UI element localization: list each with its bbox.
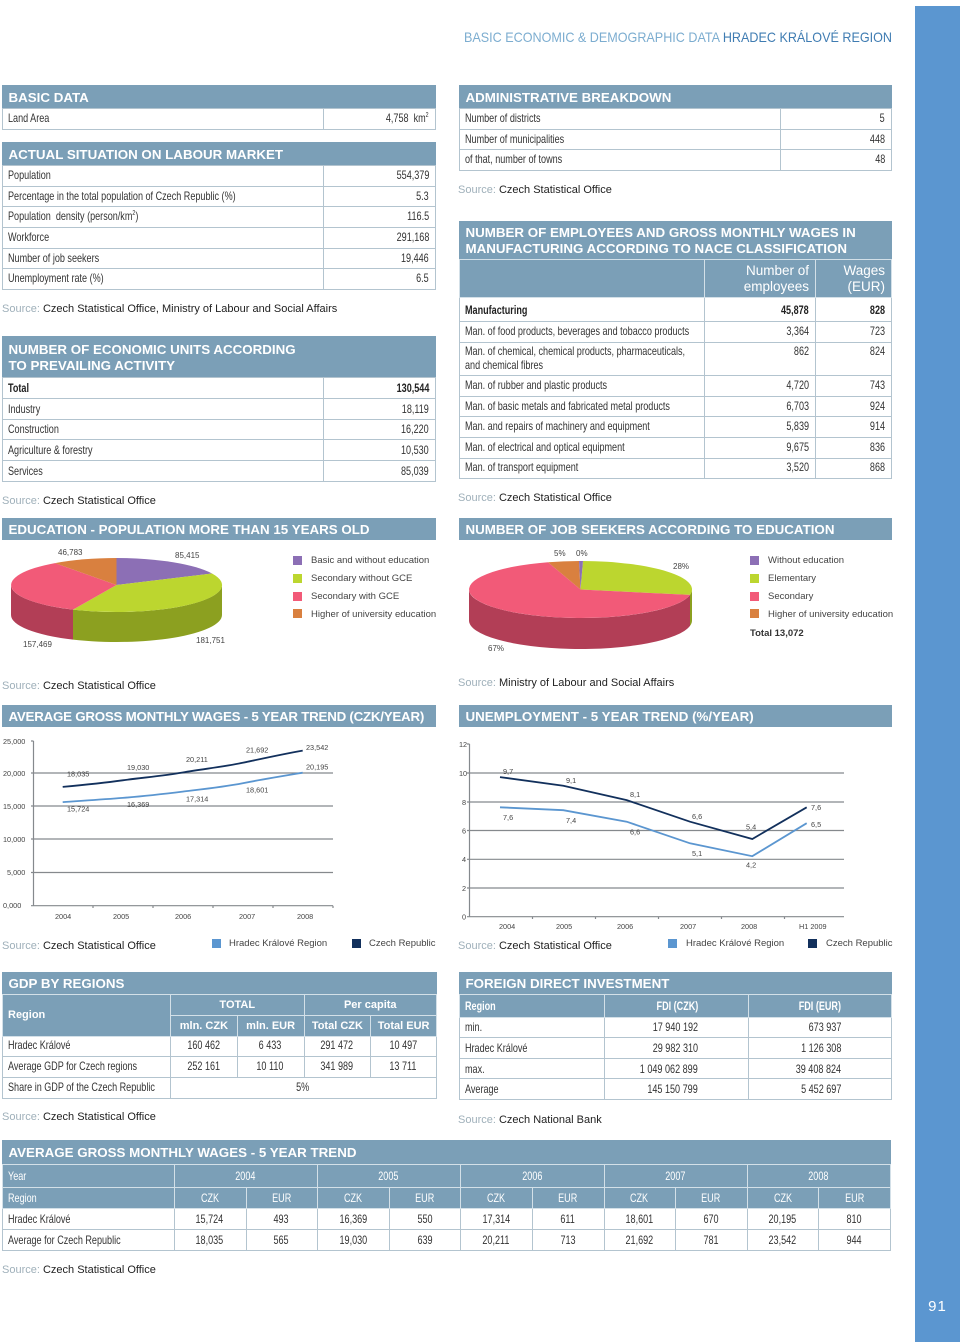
table: GDP by regions: 5% [296,1080,310,1094]
table: labour market: 5.3 [416,189,429,203]
line chart: unemployment trend: 6,6 [630,828,640,836]
table: foreign direct investment: Region [465,999,496,1013]
table: wages five-year table: Average for Czech Republic [8,1233,121,1247]
table: employees and wages: Man. of chemical, chemical products, pharmaceuticals, [465,344,685,358]
legend: education: Higher of university education [311,609,436,620]
line chart: unemployment trend: 8 [462,798,466,807]
line chart: wages trend: 17,314 [186,794,208,804]
source: job seekers: Source: Ministry of Labour and Social Affairs [458,677,674,689]
table: employees and wages: 824 [870,344,885,358]
heading: administrative breakdown [459,85,892,108]
legend: job seekers [750,555,893,639]
table: economic units: Industry [8,402,40,416]
legend: education: Basic and without education [311,555,429,566]
table: wages five-year table [2,1164,891,1251]
table: administrative breakdown: 48 [875,152,885,166]
table: employees and wages: 914 [870,419,885,433]
line chart: wages trend: 23,542 [306,743,328,752]
table: wages five-year table: CZK [773,1191,792,1205]
line chart: unemployment trend [459,740,844,931]
table: economic units: Total [8,381,29,395]
table: employees and wages: 836 [870,440,885,454]
line chart: unemployment trend: 2008 [741,922,757,931]
heading: economic units [2,336,436,377]
line chart: unemployment trend: 2007 [680,922,696,931]
table: wages five-year table: 565 [274,1233,289,1247]
table: wages five-year table: EUR [701,1191,721,1205]
heading: wages five-year table: AVERAGE GROSS MONTHLY WAGES - 5 YEAR TREND [8,1145,356,1160]
legend: unemployment chart: Hradec Králové Region [686,938,784,949]
table: GDP by regions: 6 433 [259,1038,281,1052]
page number: 91 [928,1298,947,1315]
legend: job seekers: Without education [768,555,844,566]
table: labour market [2,165,436,290]
heading: employees and wages [459,221,892,259]
table: GDP by regions: Hradec Králové [8,1038,70,1052]
table: labour market: 6.5 [416,271,429,285]
table: foreign direct investment: 1 049 062 899 [640,1062,698,1076]
table: wages five-year table: CZK [344,1191,362,1205]
table: economic units: Agriculture & forestry [8,443,93,457]
table: GDP by regions: 13 711 [390,1059,417,1073]
table: foreign direct investment: 145 150 799 [648,1082,698,1096]
line chart: unemployment trend: 2004 [499,922,515,931]
table: employees and wages: 924 [870,399,885,413]
pie chart: job seekers: 5% [554,549,566,558]
table: wages five-year table: 23,542 [769,1233,796,1247]
line chart: wages trend: 20,000 [3,769,25,778]
table: employees and wages: 743 [870,378,885,392]
line chart: unemployment trend: 5,1 [692,849,702,858]
pie chart: education: 181,751 [196,636,225,645]
heading: education [2,518,436,540]
table: foreign direct investment: FDI (EUR) [799,999,841,1013]
line chart: wages trend: 19,030 [127,763,149,772]
source: labour market: Source: Czech Statistical Office, Ministry of Labour and Social Affairs [2,303,337,315]
line chart: wages trend: 15,000 [3,802,25,811]
table: economic units: Services [8,464,43,478]
table: foreign direct investment: 29 982 310 [653,1041,698,1055]
table: economic units [2,377,436,482]
panel: basic data [2,85,436,130]
line chart: unemployment trend: 9,1 [566,776,576,785]
line chart: wages trend [3,737,334,921]
table: foreign direct investment: 5 452 697 [801,1082,841,1096]
heading: basic data: BASIC DATA [8,90,89,105]
line chart: wages trend: 10,000 [3,835,25,844]
table: GDP by regions: Average GDP for Czech regions [8,1059,137,1073]
table: wages five-year table: 670 [703,1212,719,1226]
line chart: wages trend: 20,211 [186,755,208,764]
pie chart: job seekers: 0% [576,549,588,558]
table: wages five-year table: 493 [274,1212,289,1226]
source: foreign direct investment: Source: Czech National Bank [458,1114,602,1126]
line chart: unemployment trend: 7,6 [503,813,513,822]
table: wages five-year table: 19,030 [339,1233,367,1247]
table: foreign direct investment: 673 937 [808,1020,841,1034]
table: wages five-year table: CZK [487,1191,505,1205]
table: foreign direct investment: Average [465,1082,499,1096]
table: wages five-year table: EUR [558,1191,577,1205]
legend: education: Secondary with GCE [311,591,399,602]
table: employees and wages: (EUR) [848,278,885,294]
table: wages five-year table: 550 [417,1212,432,1226]
heading: administrative breakdown: ADMINISTRATIVE BREAKDOWN [466,90,671,105]
panel: wages five-year table [2,1140,891,1251]
line chart: wages trend: 20,195 [306,762,328,772]
line chart: unemployment trend: 7,4 [566,816,576,825]
table: economic units: Construction [8,422,59,436]
table: employees and wages: 828 [870,302,885,316]
source: wages five-year table: Source: Czech Statistical Office [2,1264,156,1276]
line chart: wages trend: 5,000 [7,868,25,877]
source: wages trend chart: Source: Czech Statistical Office [2,940,156,952]
table: employees and wages: Wages [843,262,885,278]
table: employees and wages: 9,675 [786,440,809,454]
table: GDP by regions: Per capita [344,999,397,1011]
table: wages five-year table: 810 [847,1212,862,1226]
table: economic units: 16,220 [401,422,429,436]
table: wages five-year table: 20,211 [483,1233,510,1247]
heading: wages trend chart: AVERAGE GROSS MONTHLY WAGES - 5 YEAR TREND (CZK/YEAR) [8,709,424,724]
table: employees and wages: employees [744,278,809,294]
table: GDP by regions: 10 497 [389,1038,417,1052]
source: education: Source: Czech Statistical Office [2,680,156,692]
table: wages five-year table: 2007 [665,1169,685,1183]
line chart: wages trend: 16,369 [127,800,149,809]
line chart: unemployment trend: 0 [462,912,466,922]
line chart: wages trend: 0,000 [3,901,21,910]
line chart: unemployment trend: 5,4 [746,822,756,832]
heading: economic units: NUMBER OF ECONOMIC UNITS ACCORDING [8,342,296,357]
table: wages five-year table: 20,195 [769,1212,796,1226]
table: administrative breakdown: Number of municipalities [465,132,564,146]
legend: job seekers: Total 13,072 [750,628,804,639]
table: GDP by regions: 252 161 [187,1059,220,1073]
table: wages five-year table: 16,369 [339,1212,367,1226]
table: employees and wages: Man. and repairs of machinery and equipment [465,419,650,433]
panel: economic units [2,336,436,482]
heading: GDP by regions: GDP BY REGIONS [8,976,124,991]
table: wages five-year table: 17,314 [482,1212,510,1226]
table: administrative breakdown: Number of districts [465,111,541,125]
table: employees and wages: Man. of transport equipment [465,460,578,474]
table: land area [2,108,436,130]
table: GDP by regions: mln. EUR [246,1020,295,1032]
legend: job seekers: Higher of university education [768,609,893,620]
table: foreign direct investment: 17 940 192 [653,1020,698,1034]
table: labour market: 291,168 [396,230,429,244]
table: employees and wages: Man. of electrical and optical equipment [465,440,625,454]
line chart: unemployment trend: 6,5 [811,820,821,829]
table: GDP by regions: mln. CZK [180,1020,228,1032]
legend: education [293,555,436,620]
table: labour market: Number of job seekers [8,251,99,265]
legend: job seekers: Secondary [768,591,813,602]
table: foreign direct investment [459,994,892,1100]
side band with page number [915,6,960,1342]
table: labour market: Unemployment rate (%) [8,271,104,285]
table: employees and wages: Number of [746,262,809,278]
line chart: wages trend: 2004 [55,912,71,921]
table: labour market: 19,446 [401,251,429,265]
table: wages five-year table: 2006 [522,1169,542,1183]
table: employees and wages: and chemical fibres [465,358,543,372]
line chart: unemployment trend: 10 [459,769,467,778]
table: wages five-year table: 944 [847,1233,862,1247]
line chart: wages trend: 15,724 [67,804,89,814]
table: economic units: 10,530 [401,443,429,457]
table: administrative breakdown: of that, number of towns [465,152,562,166]
legend: unemployment chart [668,938,893,949]
table: employees and wages: 45,878 [781,302,809,316]
legend: wages trend chart [212,938,436,949]
pie chart: education: 157,469 [23,640,52,649]
pie chart: education: 85,415 [175,551,200,560]
table: economic units: 18,119 [402,402,429,416]
pie chart: education [11,548,225,649]
table: wages five-year table: 2004 [236,1169,256,1183]
table: labour market: Workforce [8,230,49,244]
line chart: wages trend: 18,601 [246,786,268,794]
table: administrative breakdown [459,108,892,171]
panel: employees and wages in manufacturing [459,221,892,479]
heading: foreign direct investment: FOREIGN DIRECT INVESTMENT [466,976,669,991]
table: wages five-year table: 713 [560,1233,575,1247]
line chart: unemployment trend: 9,7 [503,767,513,776]
table: GDP by regions [2,994,437,1099]
table: employees and wages: Manufacturing [465,302,527,316]
heading: economic units: TO PREVAILING ACTIVITY [8,358,175,373]
pie chart: job seekers: 67% [488,644,504,653]
table: GDP by regions: 341 989 [320,1059,353,1073]
table: GDP by regions: Total CZK [312,1020,363,1032]
page title: BASIC ECONOMIC & DEMOGRAPHIC DATA HRADEC KRÁLOVÉ REGION [464,29,892,45]
table: economic units: 85,039 [401,464,429,478]
legend: job seekers: Elementary [768,573,816,584]
line chart: unemployment trend: 6 [462,826,466,836]
heading: labour market [2,142,436,165]
table: wages five-year table: 639 [417,1233,432,1247]
table: employees and wages: Man. of food products, beverages and tobacco products [465,324,689,338]
panel: foreign direct investment [459,972,892,1100]
heading: education: EDUCATION - POPULATION MORE THAN 15 YEARS OLD [8,522,370,537]
pie chart: job seekers: 28% [673,562,689,571]
table: GDP by regions: 10 110 [257,1059,284,1073]
line chart: wages trend: 25,000 [3,737,25,746]
table: foreign direct investment: 1 126 308 [801,1041,841,1055]
source: unemployment chart: Source: Czech Statistical Office [458,940,612,952]
table: wages five-year table: Hradec Králové [8,1212,70,1226]
source: GDP by regions: Source: Czech Statistical Office [2,1111,156,1123]
table: GDP by regions: Share in GDP of the Czech Republic [8,1080,155,1094]
table: foreign direct investment: 39 408 824 [796,1062,841,1076]
source: employees and wages: Source: Czech Statistical Office [458,492,612,504]
table: employees and wages: 862 [794,344,809,358]
table: foreign direct investment: min. [465,1020,482,1034]
heading: wages trend chart [2,705,436,727]
table: wages five-year table: 2008 [808,1169,828,1183]
table: employees and wages: 5,839 [786,419,809,433]
table: GDP by regions: 160 462 [187,1038,220,1052]
line chart: unemployment trend: 4,2 [746,860,756,870]
table: wages five-year table: Region [8,1191,37,1205]
legend: wages trend chart: Hradec Králové Region [229,938,327,949]
table: employees and wages: 868 [870,460,885,474]
line chart: unemployment trend: 8,1 [630,790,640,799]
heading: GDP by regions [2,972,437,994]
table: employees and wages [459,259,892,479]
line chart: unemployment trend: 2005 [556,922,572,931]
line chart: unemployment trend: 7,6 [811,803,821,812]
pie chart: job seekers [469,549,692,653]
line chart: wages trend: 2008 [297,912,313,921]
table: wages five-year table: EUR [272,1191,291,1205]
line chart: unemployment trend: 6,6 [692,812,702,821]
table: wages five-year table: CZK [630,1191,648,1205]
table: economic units: 130,544 [396,381,429,395]
table: labour market: Population [8,168,51,182]
panel: GDP by regions [2,972,437,1099]
source: economic units: Source: Czech Statistical Office [2,495,156,507]
heading: wages five-year table [2,1140,891,1164]
line chart: unemployment trend: 4 [462,855,466,864]
line chart: wages trend: 2005 [113,912,129,921]
line chart: wages trend: 18,035 [67,770,89,778]
table: labour market: 116.5 [407,209,429,223]
table: employees and wages: Man. of basic metals and fabricated metal products [465,399,670,413]
heading: unemployment chart [459,705,892,727]
line chart: unemployment trend: 12 [459,740,467,749]
panel: administrative breakdown [459,85,892,171]
line chart: wages trend: 21,692 [246,746,268,754]
table: wages five-year table: 15,724 [196,1212,224,1226]
table: employees and wages: 3,364 [786,324,809,338]
table: administrative breakdown: 5 [880,111,885,125]
line chart: unemployment trend: 2 [462,884,466,893]
table: wages five-year table: 611 [561,1212,575,1226]
heading: job seekers [459,518,892,540]
table: labour market: Percentage in the total population of Czech Republic (%) [8,189,236,203]
table: employees and wages: 3,520 [786,460,809,474]
table: wages five-year table: 18,601 [625,1212,653,1226]
table: wages five-year table: 21,692 [625,1233,653,1247]
heading: foreign direct investment [459,972,892,994]
heading: unemployment chart: UNEMPLOYMENT - 5 YEAR TREND (%/YEAR) [466,709,754,724]
table: land area: Land Area [8,111,49,125]
line chart: wages trend: 2006 [175,912,191,921]
table: wages five-year table: EUR [415,1191,434,1205]
line chart: wages trend: 2007 [239,912,255,921]
table: wages five-year table: 781 [703,1233,719,1247]
table: foreign direct investment: max. [465,1062,485,1076]
table: GDP by regions: TOTAL [219,999,255,1011]
table: administrative breakdown: 448 [870,132,885,146]
table: wages five-year table: 2005 [379,1169,399,1183]
table: employees and wages: Man. of rubber and plastic products [465,378,607,392]
table: employees and wages: 6,703 [786,399,809,413]
table: wages five-year table: Year [8,1169,26,1183]
pie chart: education: 46,783 [58,548,83,557]
table: labour market: 554,379 [396,168,429,182]
table: wages five-year table: EUR [845,1191,864,1205]
legend: wages trend chart: Czech Republic [369,938,436,949]
table: employees and wages: 4,720 [786,378,809,392]
heading: labour market: ACTUAL SITUATION ON LABOUR MARKET [8,147,283,162]
legend: education: Secondary without GCE [311,573,412,584]
table: wages five-year table: CZK [201,1191,219,1205]
heading: employees and wages: MANUFACTURING ACCORDING TO NACE CLASSIFICATION [466,241,847,256]
line chart: unemployment trend: 2006 [617,922,633,931]
table: GDP by regions: Region [8,1009,45,1021]
panel: labour market [2,142,436,290]
heading: employees and wages: NUMBER OF EMPLOYEES AND GROSS MONTHLY WAGES IN [466,225,856,240]
source: administrative breakdown: Source: Czech Statistical Office [458,184,612,196]
table: labour market: Population density (person/km2) [8,209,138,223]
line chart: unemployment trend: H1 2009 [799,922,827,931]
table: employees and wages: 723 [870,324,885,338]
table: GDP by regions: 291 472 [320,1038,353,1052]
table: land area: 4,758 km2 [386,111,429,125]
legend: unemployment chart: Czech Republic [826,938,893,949]
heading: job seekers: NUMBER OF JOB SEEKERS ACCORDING TO EDUCATION [466,522,834,537]
table: GDP by regions: Total EUR [378,1020,430,1032]
heading: basic data [2,85,436,108]
table: foreign direct investment: FDI (CZK) [656,999,698,1013]
table: foreign direct investment: Hradec Králové [465,1041,527,1055]
table: wages five-year table: 18,035 [196,1233,224,1247]
